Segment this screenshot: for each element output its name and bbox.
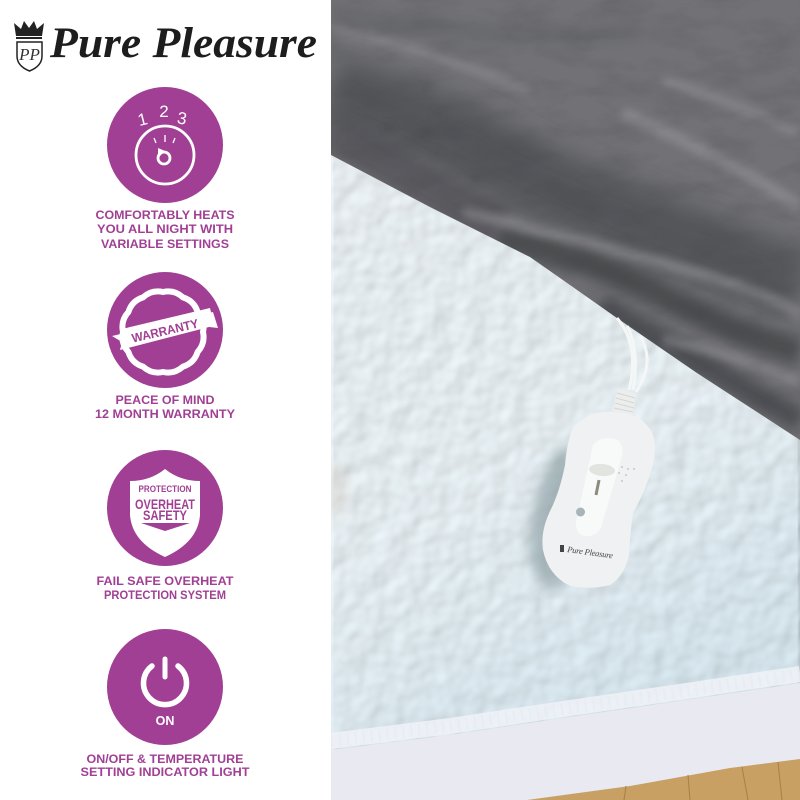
caption: [96, 208, 234, 251]
caption: COMFORTABLY HEATS: [96, 208, 234, 222]
wooden floor: [527, 759, 800, 800]
icon: safety shield: PROTECTION: [138, 484, 192, 494]
feature: warranty: [95, 272, 235, 421]
caption: [95, 393, 235, 421]
strain relief: [612, 388, 636, 416]
caption: YOU ALL NIGHT WITH: [97, 222, 233, 236]
icon: dial with settings: [107, 87, 223, 203]
icon: safety shield: SAFETY: [143, 507, 188, 523]
fleece blanket: [328, 150, 800, 760]
caption: PEACE OF MIND: [116, 393, 215, 407]
icon: dial with settings: 2: [159, 102, 169, 121]
hem stitching: [331, 674, 800, 741]
icon: warranty seal: [107, 272, 223, 388]
light streaks: [331, 30, 530, 92]
caption: [96, 574, 234, 602]
icon: power button: [107, 629, 223, 745]
controller brand mark: Pure Pleasure: [566, 544, 614, 560]
icon: warranty seal: WARRANTY: [130, 316, 200, 346]
caption: ON/OFF & TEMPERATURE: [86, 752, 244, 766]
grey plush throw: [331, 0, 800, 445]
caption: SETTING INDICATOR LIGHT: [80, 765, 250, 779]
icon: dial with settings: 1: [136, 109, 150, 130]
feature: overheat protection: [96, 450, 234, 602]
photo: blanket with remote: [328, 0, 800, 800]
remote shadow: [524, 442, 568, 594]
caption: PROTECTION SYSTEM: [104, 588, 226, 602]
icon: safety shield: OVERHEAT: [135, 496, 195, 512]
feature: variable heat settings: [96, 87, 234, 251]
icon: dial with settings: 3: [176, 108, 188, 129]
dark folds: [331, 90, 800, 285]
feature: on/off indicator: [80, 629, 250, 779]
logo: [14, 20, 317, 71]
small pressed marks: [386, 87, 479, 181]
icon: crown and shield crest: PP: [18, 45, 40, 64]
caption: FAIL SAFE OVERHEAT: [96, 574, 234, 588]
power cords: [617, 318, 647, 392]
left white panel: [0, 0, 331, 800]
icon: safety shield: [107, 450, 223, 566]
icon: crown and shield crest: [14, 21, 44, 71]
caption: VARIABLE SETTINGS: [101, 237, 229, 251]
caption: 12 MONTH WARRANTY: [95, 407, 235, 421]
caption: [80, 752, 250, 779]
icon: power button: ON: [156, 714, 174, 728]
white under-sheet: [331, 683, 800, 800]
brand name: Pure Pleasure: [49, 20, 317, 67]
hand controller: [542, 412, 655, 588]
